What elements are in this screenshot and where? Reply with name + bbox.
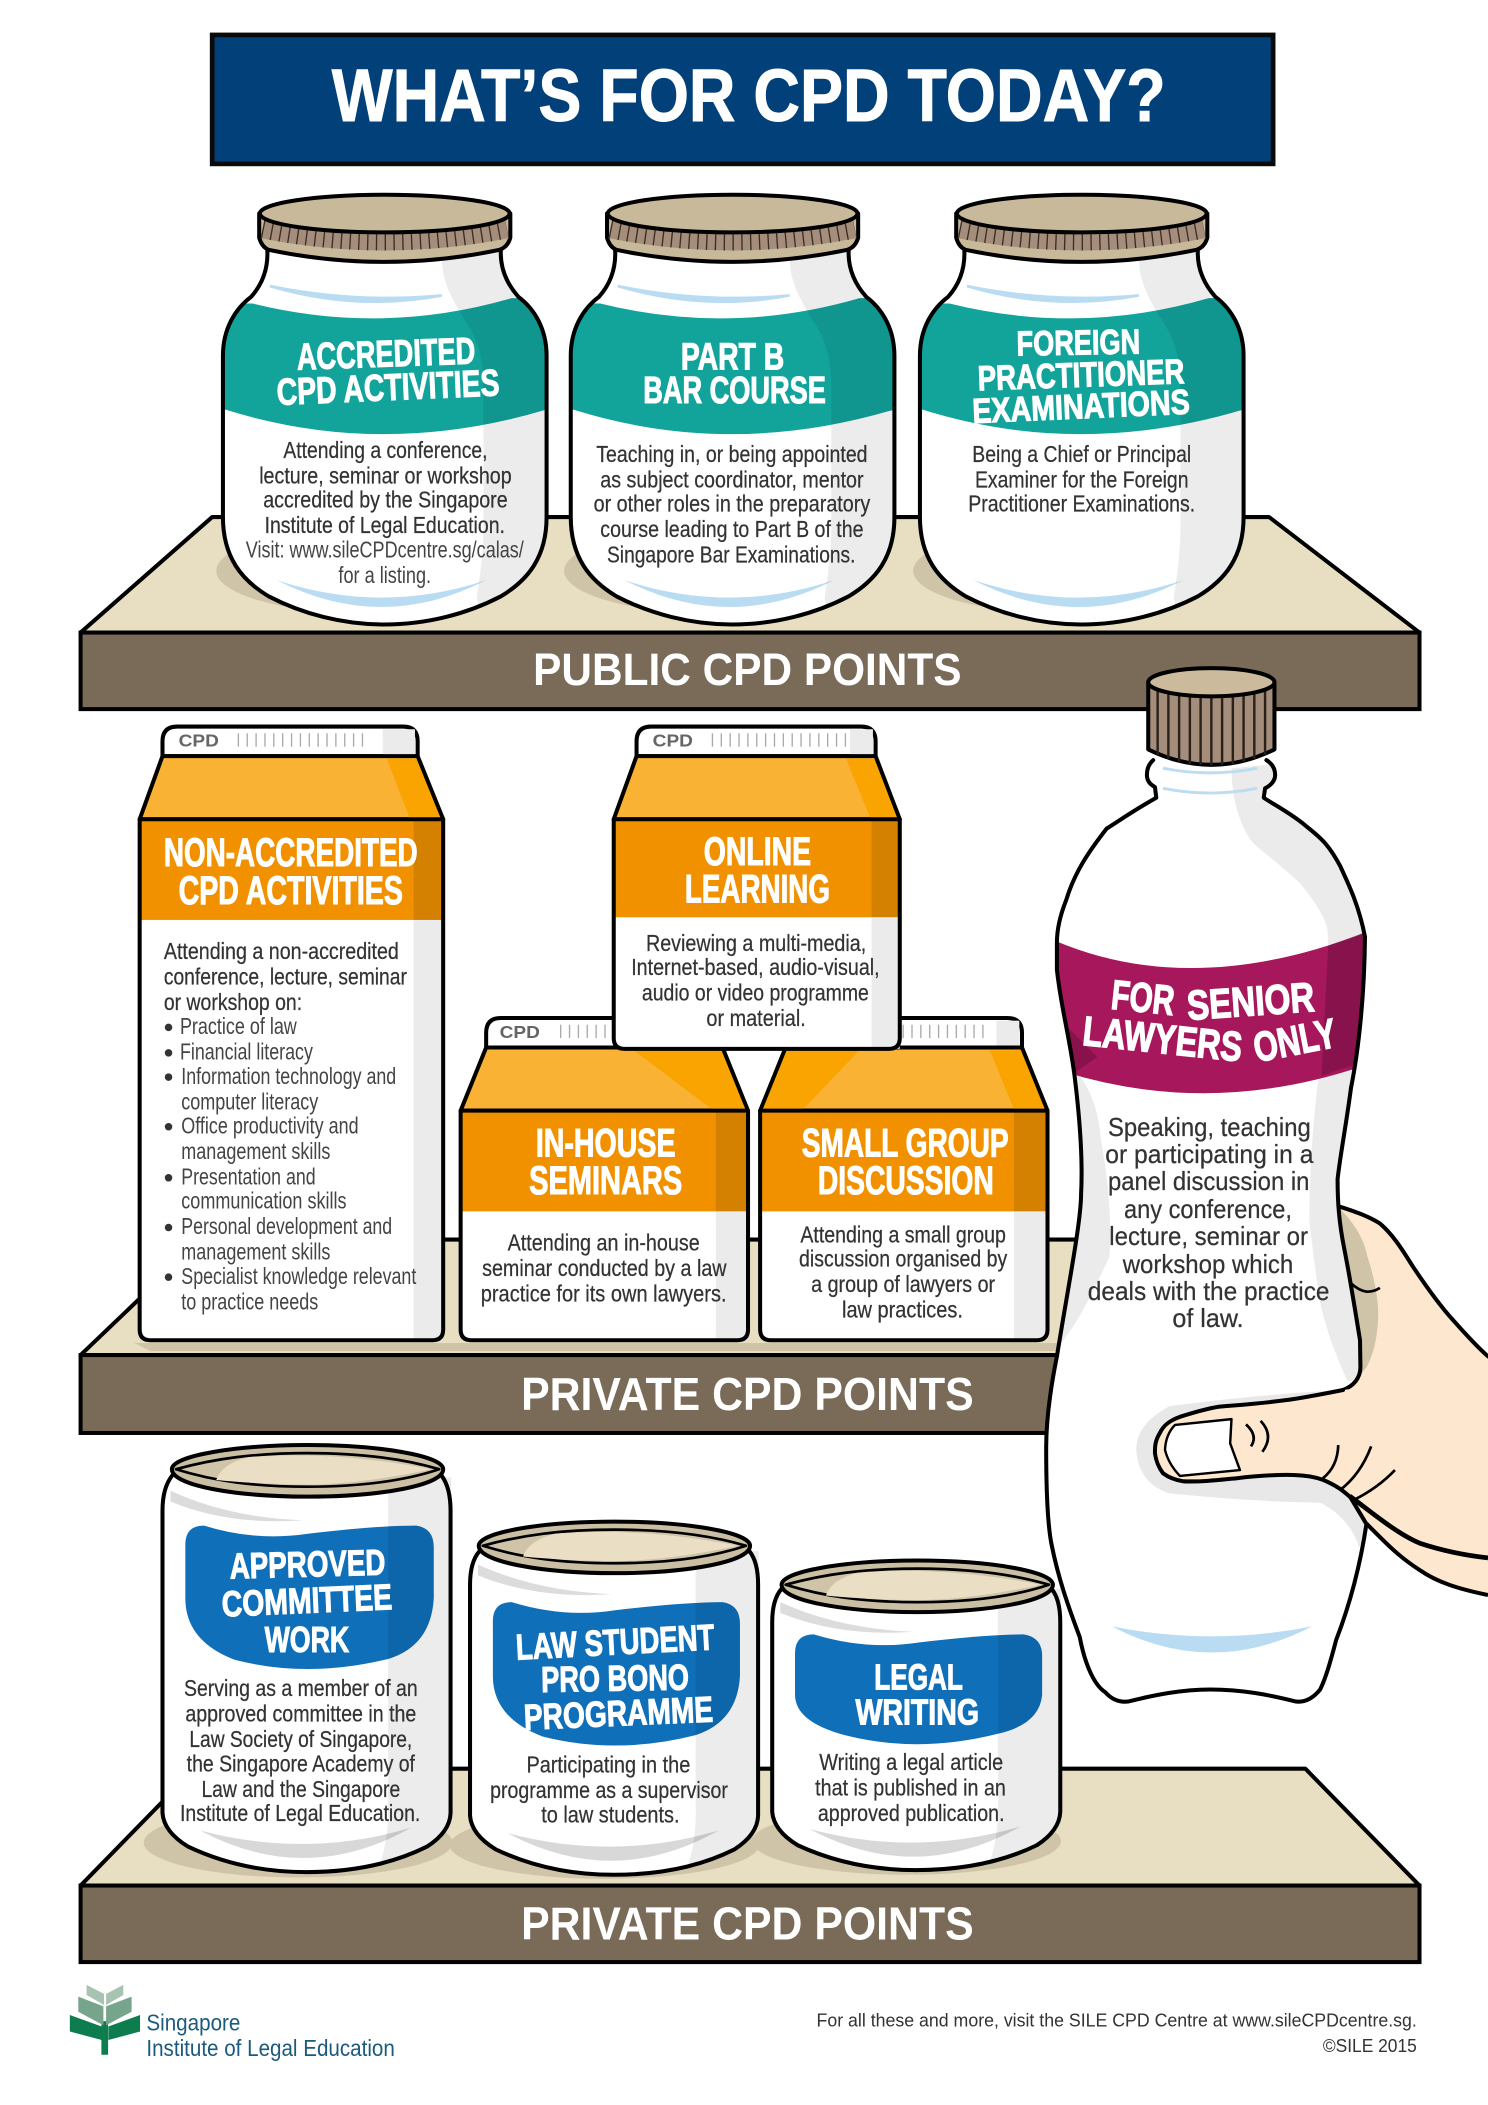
shelf: public CPD points: [81, 517, 1420, 709]
can body text: Law Society of Singapore,: [189, 1726, 412, 1752]
jar body text: Institute of Legal Education.: [265, 512, 505, 538]
jar heading: FOREIGN: [1016, 322, 1140, 364]
carton body text: audio or video programme: [642, 980, 869, 1006]
logo tree icon: [70, 1985, 140, 2055]
carton heading: [685, 829, 830, 911]
carton heading: CPD ACTIVITIES: [179, 868, 403, 913]
carton body text: Specialist knowledge relevant: [181, 1263, 417, 1289]
carton heading: LEARNING: [685, 866, 830, 911]
jar body text: Examiner for the Foreign: [975, 467, 1189, 493]
carton body text: Office productivity and: [181, 1112, 359, 1138]
jar body text: [968, 441, 1195, 517]
bottle body text: [1088, 1114, 1330, 1333]
footer note: ©SILE 2015: [1323, 2035, 1417, 2056]
bottle cap: [1148, 668, 1274, 766]
jar body text: [594, 441, 871, 568]
jar body text: lecture, seminar or workshop: [259, 462, 512, 488]
carton body text: computer literacy: [181, 1088, 319, 1114]
carton body text: [481, 1229, 727, 1306]
jar body text: accredited by the Singapore: [263, 487, 508, 513]
footer note: For all these and more, visit the SILE CPD Centre at www.sileCPDcentre.sg.: [817, 2010, 1417, 2031]
carton body text: [164, 938, 417, 1314]
bottle body text: lecture, seminar or: [1109, 1223, 1309, 1251]
shelf: private CPD points (cans): [81, 1769, 1420, 1962]
carton body text: a group of lawyers or: [811, 1271, 995, 1297]
jar heading: BAR COURSE: [643, 369, 826, 411]
jar heading: [276, 330, 500, 413]
logo: Singapore Institute of Legal Education: [70, 1985, 395, 2061]
carton cap label: CPD: [500, 1022, 540, 1042]
logo wordmark: [146, 2010, 395, 2061]
jar body text: Singapore Bar Examinations.: [607, 542, 855, 568]
jar heading: ACCREDITED: [296, 330, 476, 378]
bottle body text: or participating in a: [1105, 1141, 1314, 1169]
shelf shadow under cartons: [134, 1343, 1061, 1351]
jar body text: course leading to Part B of the: [600, 516, 864, 542]
carton body text: Personal development and: [181, 1213, 392, 1239]
carton body text: Information technology and: [181, 1063, 396, 1089]
can body text: [490, 1752, 728, 1827]
can heading: WORK: [265, 1619, 349, 1660]
bottle label heading: [1081, 971, 1340, 1071]
carton body text: law practices.: [842, 1296, 963, 1322]
carton body text: or workshop on:: [164, 989, 302, 1015]
carton body text: seminar conducted by a law: [482, 1255, 727, 1281]
jar body text: or other roles in the preparatory: [594, 491, 871, 517]
title banner: [212, 35, 1273, 164]
can heading: [515, 1616, 715, 1738]
carton heading: SEMINARS: [529, 1158, 682, 1203]
jar: accredited CPD activities: [215, 195, 564, 631]
can body text: that is published in an: [815, 1775, 1006, 1801]
jar body text: for a listing.: [338, 562, 431, 588]
carton body text: discussion organised by: [799, 1245, 1008, 1271]
bottle label heading: LAWYERS: [1081, 1007, 1245, 1071]
bottle body text: panel discussion in: [1108, 1168, 1309, 1196]
carton body text: Practice of law: [180, 1013, 297, 1039]
carton body text: management skills: [181, 1138, 330, 1164]
can body text: Institute of Legal Education.: [180, 1800, 420, 1826]
thumbnail: [1165, 1419, 1240, 1476]
bottle label heading: SENIOR: [1185, 973, 1316, 1029]
carton heading: SMALL GROUP: [802, 1120, 1009, 1165]
can body text: programme as a supervisor: [490, 1777, 728, 1803]
shelf: private CPD points (cartons): PRIVATE CPD POINTS: [521, 1368, 974, 1420]
bottle: for senior lawyers only: [1034, 668, 1397, 1702]
bottle label heading: ONLY: [1249, 1009, 1340, 1071]
title banner: WHAT’S FOR CPD TODAY?: [332, 54, 1166, 137]
jar body text: Practitioner Examinations.: [968, 491, 1195, 517]
carton heading: [529, 1120, 682, 1203]
can body text: the Singapore Academy of: [187, 1750, 416, 1776]
shelf: private CPD points (cans): PRIVATE CPD POINTS: [521, 1897, 974, 1949]
bottle label heading: FOR: [1109, 971, 1177, 1024]
bottle body text: any conference,: [1124, 1196, 1292, 1224]
can: legal writing: [752, 1561, 1061, 1875]
carton body text: or material.: [706, 1005, 806, 1031]
carton: online learning: [614, 727, 900, 1049]
carton: in-house seminars: [461, 1018, 748, 1340]
can: law student pro bono programme: [450, 1522, 759, 1879]
carton heading: [802, 1120, 1009, 1203]
can body text: [180, 1675, 420, 1826]
carton body text: Presentation and: [181, 1164, 316, 1190]
can heading: COMMITTEE: [221, 1576, 393, 1625]
jar body text: as subject coordinator, mentor: [600, 467, 864, 493]
jar heading: CPD ACTIVITIES: [276, 361, 500, 413]
can body text: Serving as a member of an: [184, 1675, 418, 1701]
jar heading: PART B: [681, 335, 784, 377]
logo wordmark: Institute of Legal Education: [146, 2035, 395, 2061]
jar body text: [246, 437, 524, 588]
carton body text: practice for its own lawyers.: [481, 1280, 727, 1306]
jar heading: [971, 322, 1191, 431]
jar body text: Attending a conference,: [283, 437, 487, 463]
carton body text: communication skills: [181, 1188, 346, 1214]
can body text: [815, 1749, 1006, 1826]
can body text: to law students.: [541, 1801, 680, 1827]
shelf: private CPD points (cartons): [81, 1240, 1209, 1433]
can heading: WRITING: [855, 1691, 979, 1732]
carton cap label: CPD: [179, 731, 219, 751]
jar heading: [643, 335, 826, 411]
can heading: [221, 1542, 393, 1660]
carton body text: Reviewing a multi-media,: [646, 930, 866, 956]
carton cap label: CPD: [653, 731, 693, 751]
bottle body text: Speaking, teaching: [1108, 1114, 1311, 1142]
shelf: public CPD points: PUBLIC CPD POINTS: [533, 644, 962, 695]
carton heading: DISCUSSION: [818, 1158, 994, 1203]
carton body text: conference, lecture, seminar: [164, 963, 407, 989]
carton body text: Internet-based, audio-visual,: [631, 954, 880, 980]
carton body text: Attending a small group: [800, 1221, 1006, 1247]
can heading: PRO BONO: [541, 1657, 689, 1700]
can heading: LAW STUDENT: [515, 1616, 715, 1668]
logo wordmark: Singapore: [146, 2010, 240, 2036]
can heading: PROGRAMME: [523, 1689, 714, 1738]
carton: non-accredited CPD activities: [140, 727, 443, 1340]
carton body text: [799, 1221, 1008, 1322]
carton heading: NON-ACCREDITED: [164, 830, 418, 875]
carton heading: IN-HOUSE: [536, 1120, 676, 1165]
carton: small group discussion: [760, 1018, 1048, 1340]
can body text: Law and the Singapore: [201, 1776, 400, 1802]
carton body text: [631, 930, 880, 1031]
can body text: approved committee in the: [185, 1701, 416, 1727]
carton heading: ONLINE: [704, 829, 811, 874]
can heading: [855, 1656, 979, 1732]
jar: Part B bar course: [563, 195, 912, 631]
carton body text: Attending a non-accredited: [164, 938, 399, 964]
carton body text: Attending an in-house: [508, 1229, 700, 1255]
jar body text: Visit: www.sileCPDcentre.sg/calas/: [246, 536, 524, 562]
hand holding bottle: thumb: [1155, 1383, 1488, 1595]
jar body text: Being a Chief or Principal: [972, 441, 1191, 467]
carton body text: to practice needs: [181, 1288, 318, 1314]
carton body text: management skills: [181, 1239, 330, 1265]
can body text: Writing a legal article: [819, 1749, 1003, 1775]
bottle body text: of law.: [1172, 1305, 1244, 1333]
can heading: APPROVED: [229, 1542, 386, 1587]
jar body text: Teaching in, or being appointed: [596, 441, 868, 467]
can: approved committee work: [144, 1445, 453, 1877]
bottle body text: workshop which: [1122, 1251, 1293, 1279]
jar heading: EXAMINATIONS: [971, 383, 1191, 431]
carton body text: Financial literacy: [180, 1039, 313, 1065]
carton heading: [164, 830, 418, 913]
footer note: [817, 2010, 1417, 2056]
can heading: LEGAL: [874, 1656, 963, 1697]
hand holding bottle: back of hand: [1323, 1207, 1488, 1595]
bottle body text: deals with the practice: [1088, 1278, 1330, 1306]
can body text: Participating in the: [526, 1752, 690, 1778]
jar: foreign practitioner examinations: [912, 195, 1261, 631]
can body text: approved publication.: [818, 1800, 1005, 1826]
jar heading: PRACTITIONER: [977, 352, 1185, 398]
